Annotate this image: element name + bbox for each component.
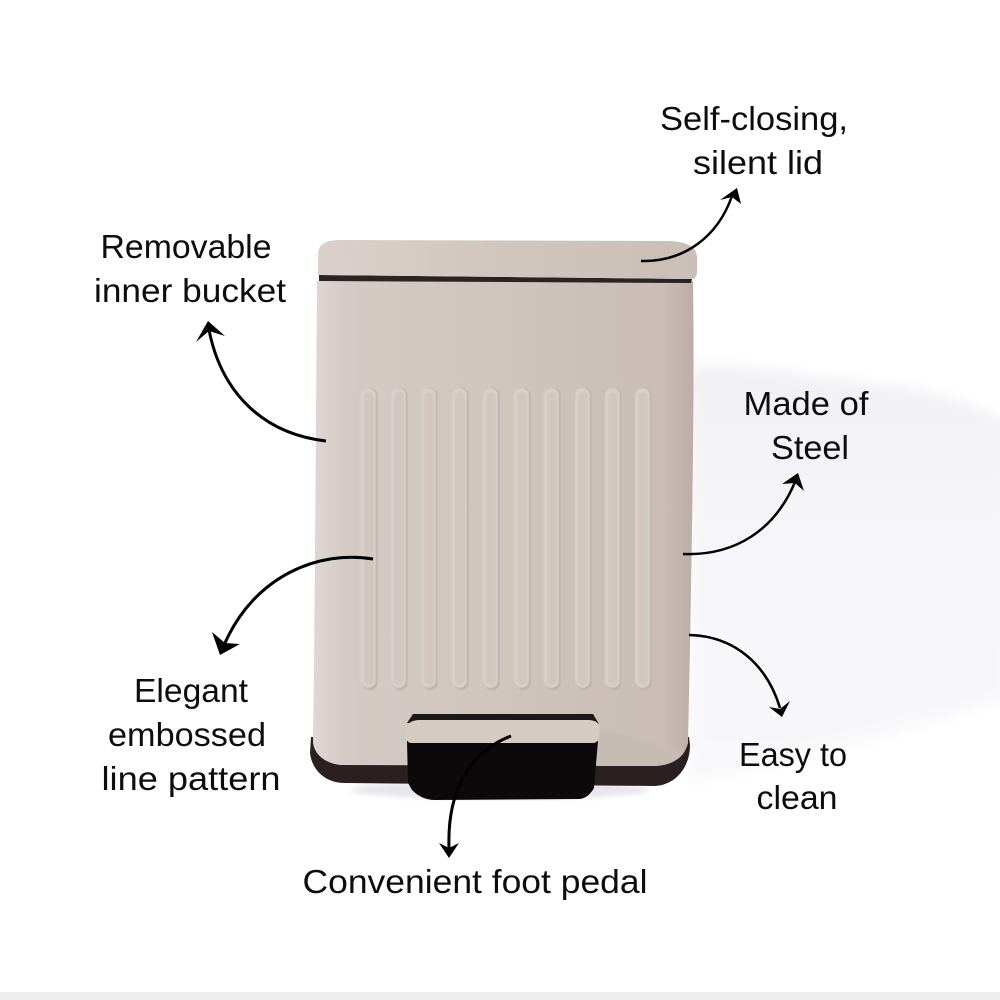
- arrow: [449, 736, 511, 848]
- rib faces: [364, 392, 648, 685]
- rib shadows: [362, 388, 652, 690]
- callout: embossed line pattern: line pattern: [102, 760, 280, 797]
- label: Convenient foot pedal: [302, 863, 648, 900]
- label: Made of: [744, 385, 869, 422]
- pedal slot: [407, 714, 599, 724]
- callout: convenient foot pedal: [302, 736, 648, 900]
- pedal top: [406, 720, 600, 743]
- arrow: [641, 196, 732, 261]
- label: Removable: [100, 228, 272, 265]
- callout: removable inner bucket: [94, 228, 326, 441]
- callout: easy to clean: clean: [756, 779, 838, 816]
- pedal black housing: [407, 741, 598, 800]
- callout: made of steel: [683, 385, 869, 554]
- callout: embossed line pattern: [102, 557, 373, 797]
- rib highlights: [361, 388, 650, 688]
- arrow: [225, 557, 373, 643]
- arrow: [683, 482, 795, 554]
- label: Easy to: [739, 736, 847, 773]
- callout: self-closing lid: [641, 100, 848, 261]
- lid gap: [319, 275, 692, 283]
- bin body: [313, 281, 694, 766]
- callout: self-closing lid: silent lid: [693, 144, 823, 181]
- label: Elegant: [134, 672, 248, 709]
- callout: removable inner bucket: inner bucket: [94, 272, 286, 309]
- base shadow: [350, 781, 650, 799]
- lid: [318, 240, 697, 279]
- arrow: [689, 635, 780, 708]
- bin: [310, 240, 697, 800]
- callout: made of steel: Steel: [771, 429, 849, 466]
- callout: easy to clean: [689, 635, 847, 816]
- bottom strip: [0, 992, 1000, 1000]
- label: Self-closing,: [660, 100, 848, 137]
- wall shadow: [690, 366, 1000, 782]
- black base: [310, 737, 690, 786]
- callout: embossed line pattern: embossed: [108, 716, 266, 753]
- pedal wedge shade: [598, 727, 685, 766]
- embossed line pattern: [361, 388, 652, 690]
- arrow: [209, 330, 326, 441]
